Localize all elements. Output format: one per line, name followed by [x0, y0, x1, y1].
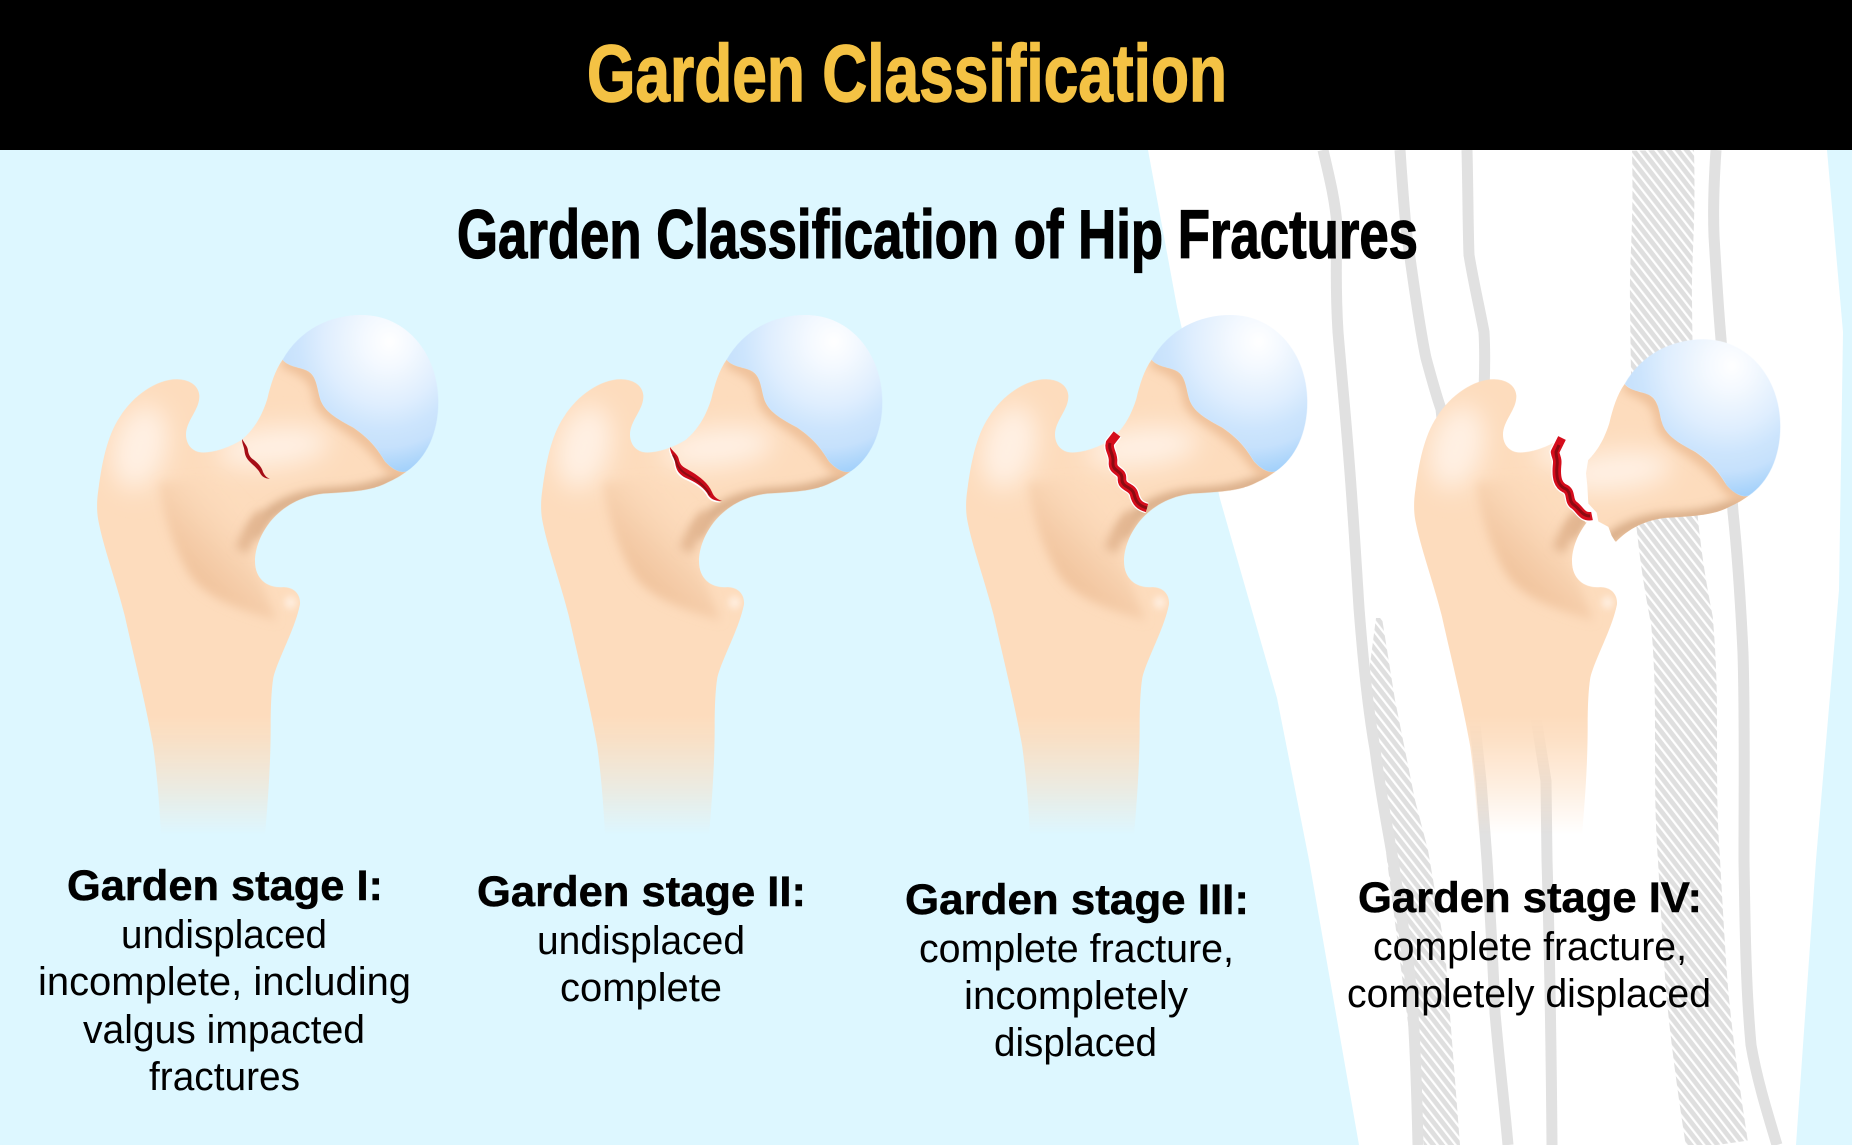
caption: stage IV [1347, 874, 1711, 1016]
caption: stage III [905, 876, 1249, 1065]
caption: stage I: valgus impacted [83, 1008, 365, 1052]
caption: stage III: displaced [994, 1021, 1157, 1065]
caption: stage III: Garden stage III: [905, 876, 1249, 924]
caption: stage I [38, 862, 411, 1099]
caption: stage II: complete [560, 966, 722, 1010]
caption: stage II [477, 868, 806, 1010]
caption: stage II: undisplaced [537, 919, 745, 963]
title banner [0, 0, 1852, 150]
caption: stage I: undisplaced [121, 913, 327, 957]
caption: stage IV: Garden stage IV: [1358, 874, 1702, 922]
caption: stage I: Garden stage I: [67, 862, 383, 910]
femur: stage II [541, 315, 882, 835]
caption: stage I: incomplete, including [38, 960, 411, 1004]
caption: stage II: Garden stage II: [477, 868, 806, 916]
femur: stage III [966, 315, 1307, 835]
fracture line: stage III [1110, 434, 1147, 508]
background: white sketched leg band [1148, 150, 1843, 1145]
caption: stage III: complete fracture, [919, 927, 1234, 971]
distal fragment [1414, 379, 1617, 821]
femoral head fragment [1586, 340, 1780, 542]
femur: stage IV, displaced [1414, 340, 1780, 821]
caption: stage I: fractures [149, 1055, 300, 1099]
fracture line: stage II [669, 447, 722, 502]
title: Garden Classification [587, 29, 1227, 119]
fracture line: stage IV [1555, 438, 1592, 516]
caption: stage IV: complete fracture, [1373, 925, 1687, 969]
subtitle heading: Garden Classification of Hip Fractures [457, 196, 1418, 273]
caption: stage III: incompletely [964, 974, 1188, 1018]
femur: stage I [97, 315, 438, 835]
fracture line: stage I [242, 439, 270, 479]
caption: stage IV: completely displaced [1347, 972, 1711, 1016]
